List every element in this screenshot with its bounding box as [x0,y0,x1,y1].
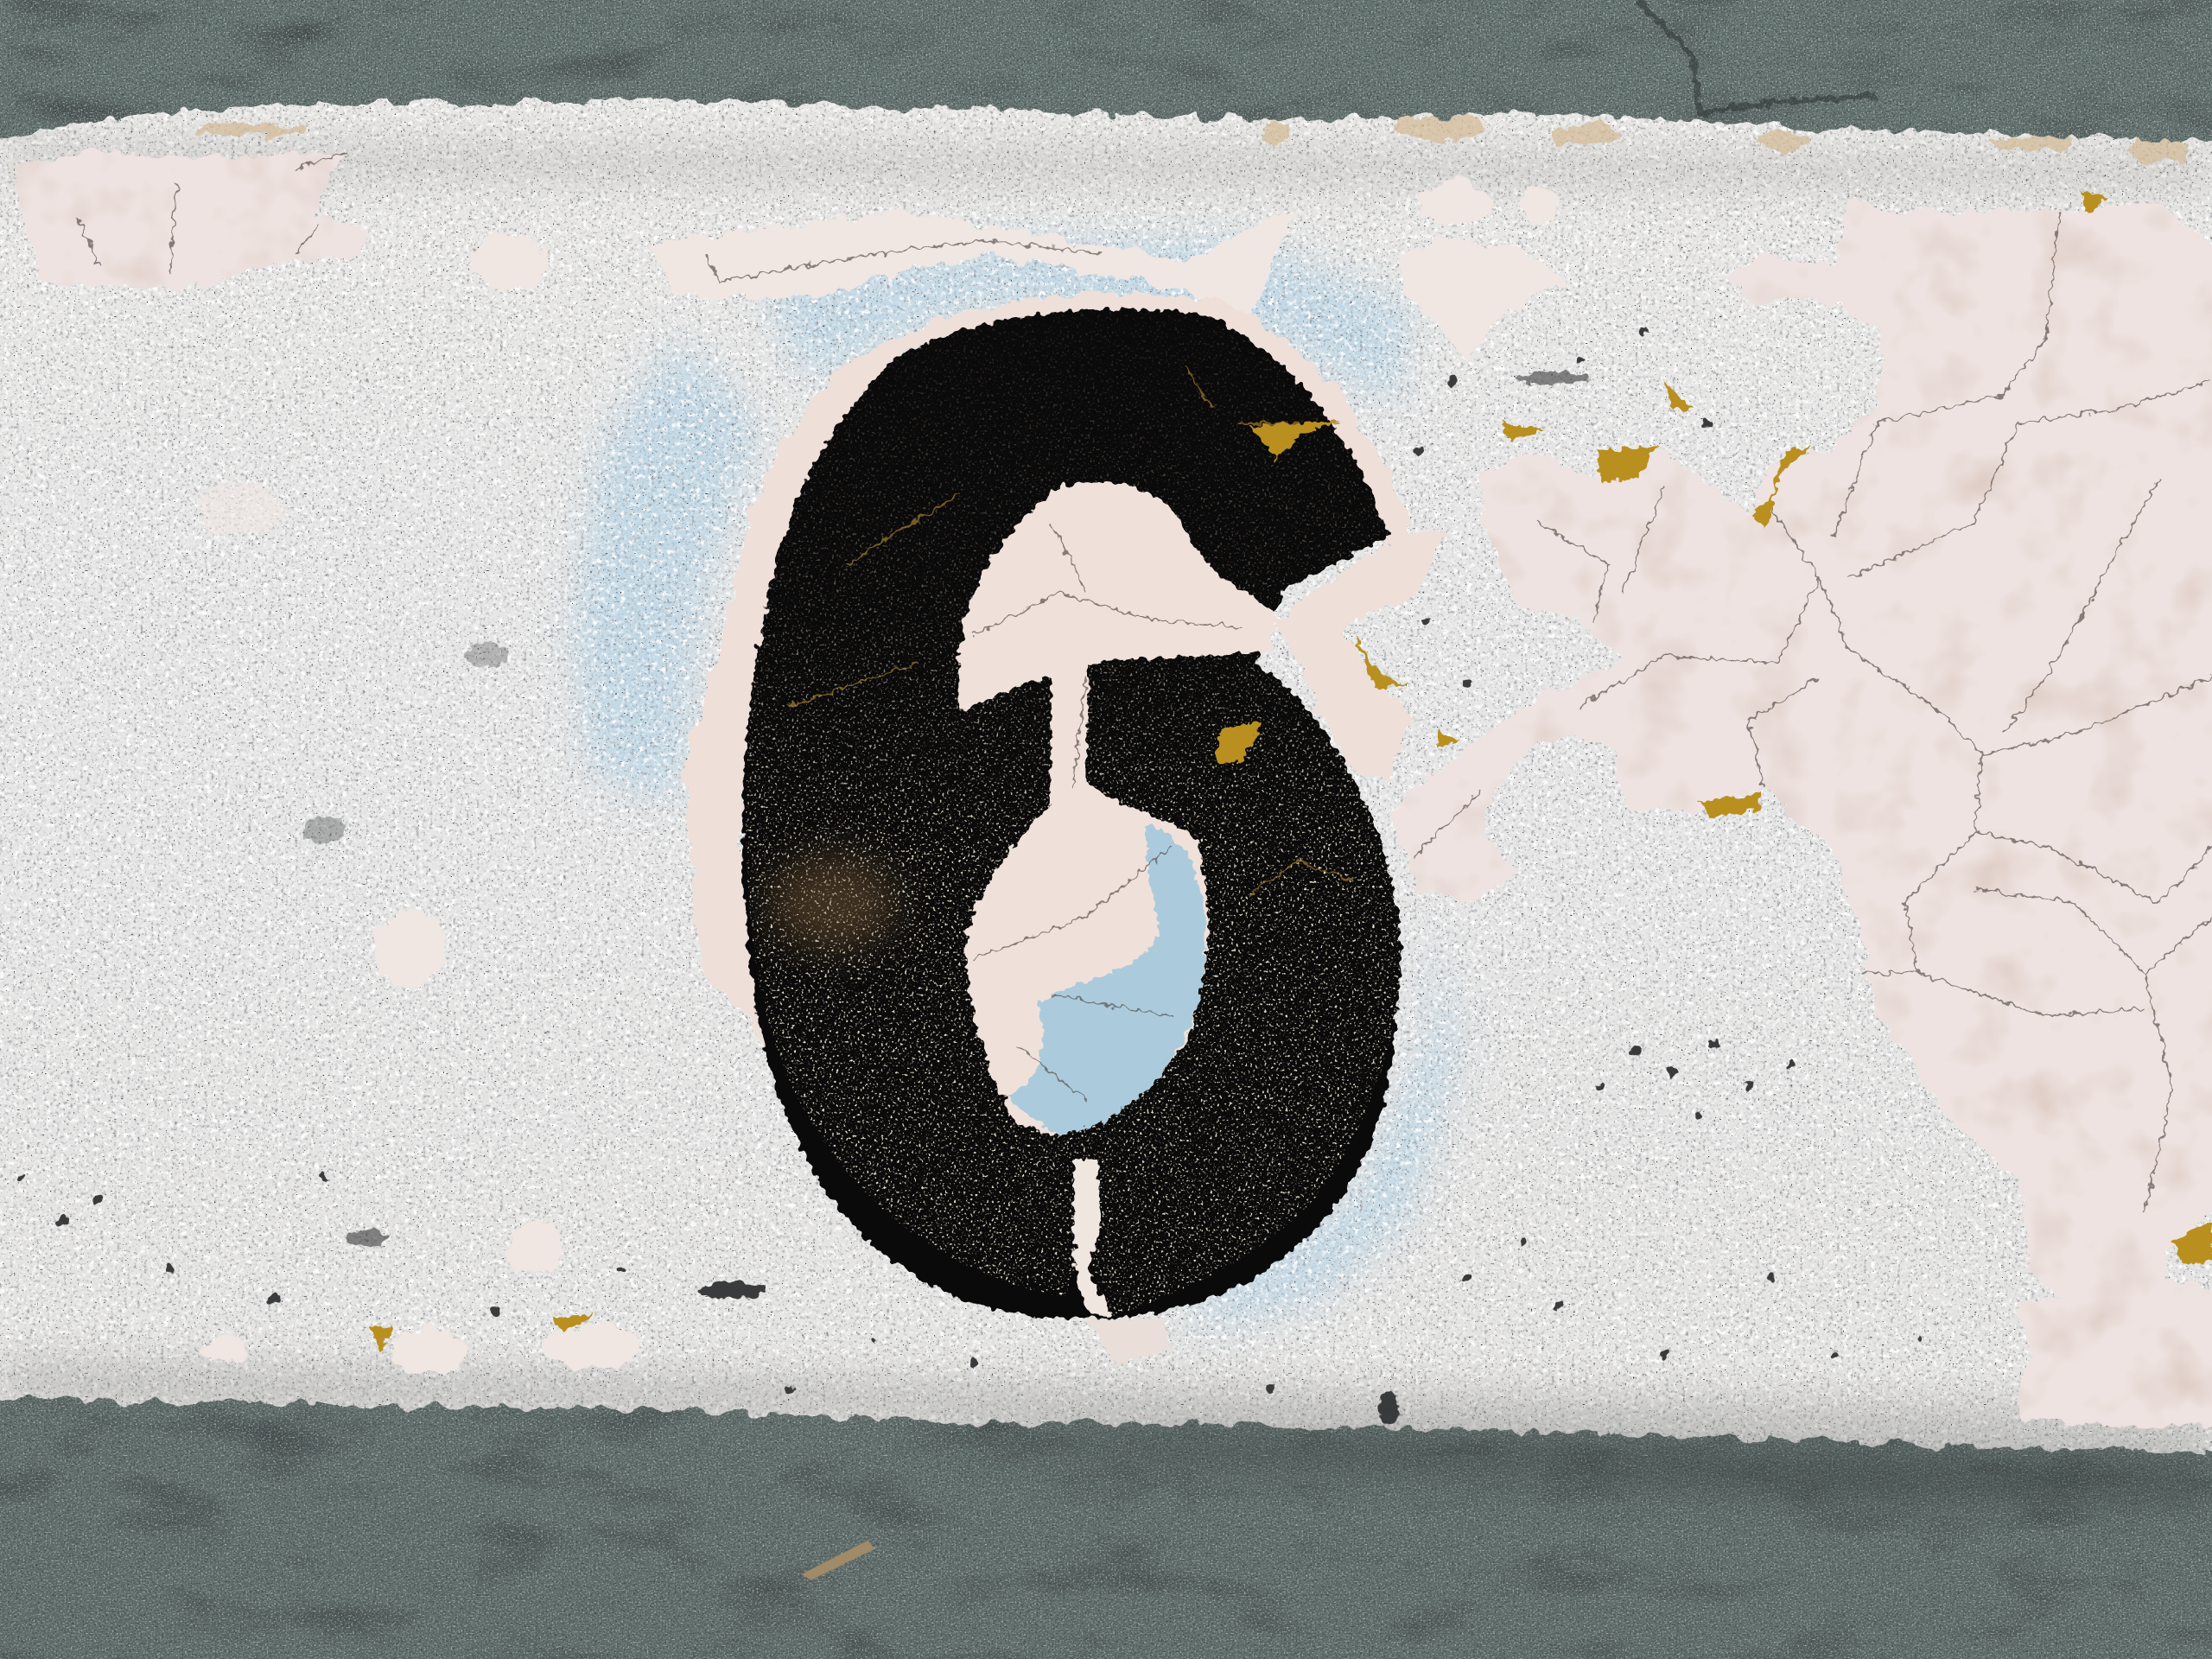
halo of pink paint around the number [684,294,1446,1086]
grime along the bottom of the white band [0,1362,2212,1453]
number 6 stencilled in black [693,29,1446,1605]
pale blue paint around the number [571,240,1460,1326]
numeral: 6 [693,29,1446,1605]
panel: cracked peeling paint on the right [11,152,2212,1427]
panel: grey asphalt strip at top [0,0,2212,141]
gold cracks across the black paint [790,366,1354,896]
twig on the bottom asphalt [801,1541,874,1580]
dark shadow along the lower paint edge [931,1436,2212,1498]
worn white speckles in the black paint [746,309,1401,1319]
ochre rust patches [370,190,2212,1459]
peeled paint inside the number [958,481,1277,1135]
paint flakes scattered on the wall [198,179,1566,1374]
paint flake below the number [1086,1319,1171,1362]
slit in the bottom of the number [1072,1160,1112,1315]
dark chips in the wall paint [17,327,1922,1425]
pale blue undercoat in the counter [1004,825,1205,1135]
grime along the top of the white band [0,141,2212,190]
tan weathered flecks along top edge [198,114,2190,162]
stencil body backing the numeral [746,309,1401,1319]
dark crack in top asphalt [1637,0,1876,113]
panel: grey asphalt strip at bottom [0,1400,2212,1659]
cracks in the peeling paint [78,152,2212,1213]
